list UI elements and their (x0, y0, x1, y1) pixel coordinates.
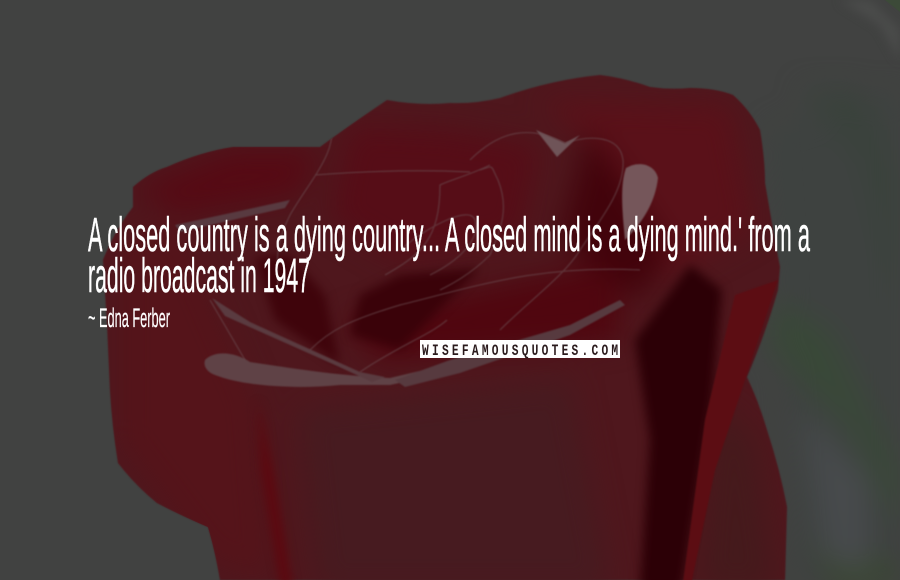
quote text (88, 209, 810, 303)
rose silhouette (103, 75, 787, 580)
quote text: radio broadcast in 1947 (88, 250, 310, 303)
quote card: ~ Edna Ferber (88, 303, 170, 333)
bright petal rims (175, 130, 658, 387)
dark folds (635, 265, 722, 580)
watermark: WISEFAMOUSQUOTES.COM (422, 343, 621, 361)
petal shading (160, 112, 764, 580)
rose (103, 75, 787, 580)
petal outlines (210, 120, 640, 372)
